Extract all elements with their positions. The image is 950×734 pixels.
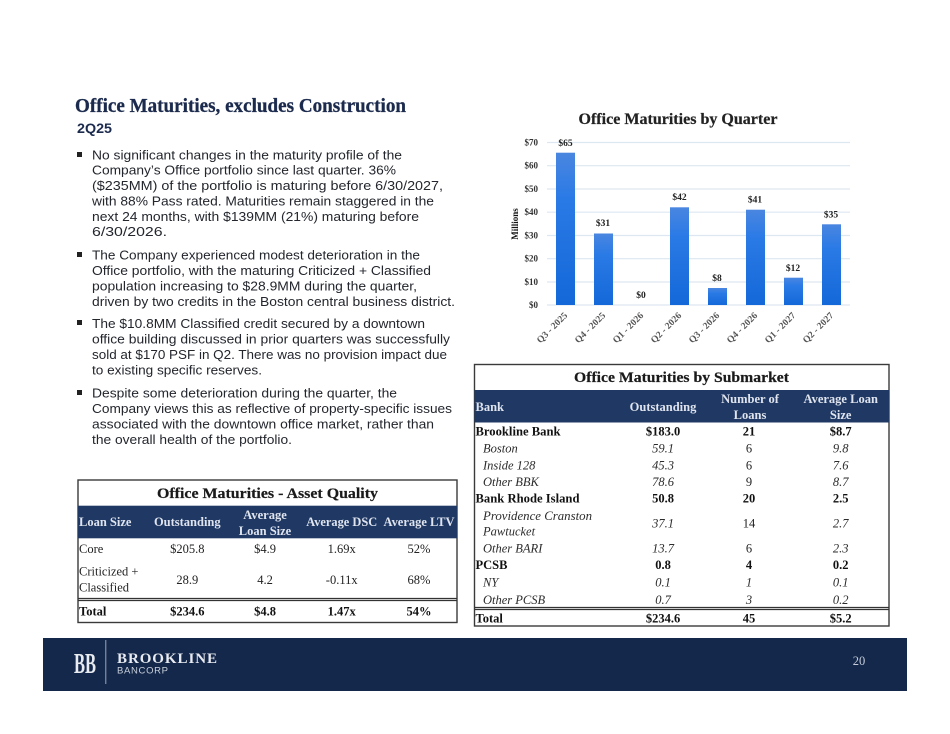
- bullet 1: Company’s Office portfolio since last quarter. 36%: [92, 163, 396, 178]
- x axis labels: Q2 - 2026: [649, 311, 684, 346]
- subtitle: 2Q25: 2Q25: [77, 120, 112, 136]
- y axis labels: $30: [524, 230, 538, 240]
- table rows: 1.69x: [328, 542, 357, 556]
- y axis labels: $20: [524, 254, 538, 264]
- data labels: $12: [786, 263, 800, 274]
- x axis labels: Q4 - 2026: [725, 311, 760, 346]
- table total row: Total: [476, 612, 503, 626]
- y axis labels: $50: [524, 184, 538, 194]
- y axis labels: $70: [524, 138, 538, 148]
- data labels: $31: [596, 218, 610, 229]
- table rows: $8.7: [830, 425, 852, 439]
- y axis title: Millions: [510, 208, 520, 240]
- table total row: 54%: [406, 605, 432, 619]
- table header: [78, 506, 457, 538]
- table rows: 1: [746, 575, 752, 589]
- table rows: PCSB: [476, 558, 507, 572]
- table rows: 14: [743, 517, 756, 531]
- bullet 3: [77, 316, 451, 378]
- y axis labels: $40: [524, 207, 538, 217]
- table: office maturities by submarket: [474, 364, 889, 626]
- bullet 4: the overall health of the portfolio.: [92, 432, 292, 447]
- table total row: $234.6: [170, 605, 204, 619]
- page number: 20: [853, 654, 865, 668]
- table total row: $234.6: [646, 612, 680, 626]
- bullet 3: to existing specific reserves.: [92, 362, 262, 378]
- table rows: NY: [482, 575, 500, 589]
- table header: Average LTV: [384, 515, 454, 529]
- table total row: $4.8: [254, 605, 276, 619]
- table rows: Criticized +: [79, 565, 138, 579]
- bullet 1: No significant changes in the maturity profile of the: [92, 148, 402, 162]
- table rows: 78.6: [652, 475, 675, 489]
- table rows: 6: [746, 442, 752, 456]
- bullet 1: ($235MM) of the portfolio is maturing before 6/30/2027,: [92, 178, 443, 193]
- data labels: $0: [636, 290, 646, 301]
- bullet 3: office building discussed in prior quarters was successfully: [92, 332, 451, 346]
- table title: Office Maturities - Asset Quality: [157, 486, 379, 502]
- x axis labels: Q2 - 2027: [801, 311, 836, 346]
- table total row: $5.2: [830, 612, 852, 626]
- table rows: 0.1: [655, 575, 671, 589]
- table rows: Providence Cranston: [482, 509, 592, 523]
- data labels: [558, 138, 838, 301]
- table rows: 20: [743, 492, 755, 506]
- table rows: -0.11x: [326, 573, 358, 587]
- table rows: Other BBK: [483, 475, 540, 489]
- table rows: 37.1: [651, 517, 674, 531]
- table rows: 7.6: [833, 458, 849, 472]
- table header: Loans: [734, 408, 766, 422]
- footer band: [43, 638, 907, 691]
- x axis labels: Q1 - 2027: [763, 311, 798, 346]
- table rows: 4.2: [257, 573, 273, 587]
- y axis labels: [524, 138, 538, 310]
- table header: Loan Size: [239, 524, 292, 538]
- data labels: $8: [712, 273, 722, 284]
- table rows: 0.2: [833, 558, 849, 572]
- table header: Bank: [476, 400, 504, 414]
- table: office maturities asset quality: [78, 480, 457, 622]
- bullet 2: [77, 248, 455, 309]
- table rows: 21: [743, 425, 755, 439]
- table rows: Bank Rhode Island: [476, 492, 580, 506]
- logo sub-wordmark: BANCORP: [117, 666, 168, 676]
- table total row: [476, 612, 852, 626]
- table header: Number of: [721, 392, 780, 406]
- table header: Loan Size: [79, 515, 132, 529]
- table rows: 2.7: [833, 517, 849, 531]
- table rows: 50.8: [652, 492, 674, 506]
- x axis labels: Q3 - 2026: [687, 311, 722, 346]
- bullet 4: [77, 386, 452, 447]
- table rows: Brookline Bank: [476, 425, 561, 439]
- logo divider: [105, 640, 106, 684]
- table rows: Other BARI: [483, 541, 543, 555]
- x axis labels: Q3 - 2025: [535, 311, 570, 346]
- data labels: $41: [748, 194, 762, 206]
- table rows: 3: [745, 593, 752, 607]
- table rows: 8.7: [833, 475, 849, 489]
- bullet 2: driven by two credits in the Boston central business district.: [92, 294, 455, 309]
- bullet 1: with 88% Pass rated. Maturities remain staggered in the: [91, 194, 434, 209]
- x axis labels: Q1 - 2026: [611, 311, 646, 346]
- table rows: 4: [746, 558, 753, 572]
- table rows: 0.8: [655, 558, 671, 572]
- x axis labels: Q4 - 2025: [573, 311, 608, 346]
- bullet 2: The Company experienced modest deterioration in the: [92, 248, 420, 263]
- table rows: 68%: [408, 573, 430, 587]
- table rows: $183.0: [646, 425, 680, 439]
- table header: Outstanding: [154, 515, 221, 529]
- table rows: Other PCSB: [483, 593, 546, 607]
- bullet 4: Despite some deterioration during the quarter, the: [92, 386, 397, 400]
- table rows: 0.1: [833, 575, 849, 589]
- table header: [474, 390, 889, 422]
- table rows: Inside 128: [482, 458, 536, 472]
- bullet 4: associated with the downtown office market, rather than: [92, 416, 434, 432]
- table rows: Pawtucket: [482, 525, 536, 539]
- bullet 1: [77, 148, 443, 239]
- bullet 4: Company views this as reflective of property-specific issues: [92, 401, 452, 416]
- table rows: $4.9: [254, 542, 276, 556]
- bullet 1: 6/30/2026.: [92, 224, 167, 239]
- table total row: 45: [743, 612, 755, 626]
- table total row: 1.47x: [328, 605, 357, 619]
- table rows: 6: [746, 541, 752, 555]
- table header: Outstanding: [630, 400, 697, 414]
- table header: Average: [243, 508, 287, 522]
- bar chart: office maturities by quarter: [510, 138, 850, 346]
- logo wordmark: BROOKLINE: [117, 651, 217, 667]
- bullet 1: next 24 months, with $139MM (21%) maturing before: [92, 209, 419, 224]
- data labels: $42: [672, 192, 687, 203]
- table rows: Classified: [79, 581, 130, 595]
- table rows: 0.2: [833, 593, 849, 607]
- table rows: 9.8: [833, 442, 849, 456]
- icon: Brookline BB monogram: BB: [74, 648, 96, 680]
- bullet 2: Office portfolio, with the maturing Criticized + Classified: [92, 263, 431, 278]
- bullet 3: The $10.8MM Classified credit secured by a downtown: [92, 316, 425, 331]
- table rows: 59.1: [652, 442, 674, 456]
- y axis labels: $10: [524, 277, 538, 287]
- table rows: Boston: [483, 442, 518, 456]
- chart title: Office Maturities by Quarter: [578, 111, 778, 128]
- table rows: [79, 542, 430, 595]
- table rows: 28.9: [176, 573, 198, 587]
- bullet 2: population increasing to $28.9MM during the quarter,: [92, 278, 417, 294]
- table total row: Total: [79, 605, 107, 619]
- table title: Office Maturities by Submarket: [574, 370, 789, 386]
- table total row: [79, 605, 432, 619]
- table header: Average Loan: [803, 392, 878, 406]
- data labels: $65: [558, 138, 573, 149]
- table header: Size: [830, 408, 852, 422]
- data labels: $35: [824, 210, 838, 220]
- table rows: 45.3: [652, 458, 674, 472]
- table rows: Core: [79, 542, 104, 556]
- table rows: 2.3: [833, 541, 849, 555]
- table rows: $205.8: [170, 542, 204, 556]
- table rows: 9: [746, 475, 752, 489]
- y axis labels: $60: [524, 161, 538, 171]
- table rows: 2.5: [833, 492, 849, 506]
- table rows: 13.7: [652, 541, 675, 555]
- bullet 3: sold at $170 PSF in Q2. There was no provision impact due: [92, 347, 447, 362]
- table rows: [476, 425, 852, 607]
- table header: Average DSC: [306, 515, 377, 529]
- table rows: 0.7: [655, 593, 672, 607]
- bars: [556, 153, 841, 305]
- text block: commentary bullets: [77, 148, 455, 447]
- table rows: 52%: [408, 542, 430, 556]
- y axis labels: $0: [529, 300, 538, 310]
- table rows: 6: [746, 458, 752, 472]
- x axis labels: [535, 311, 836, 346]
- title: Office Maturities, excludes Construction: [75, 95, 407, 117]
